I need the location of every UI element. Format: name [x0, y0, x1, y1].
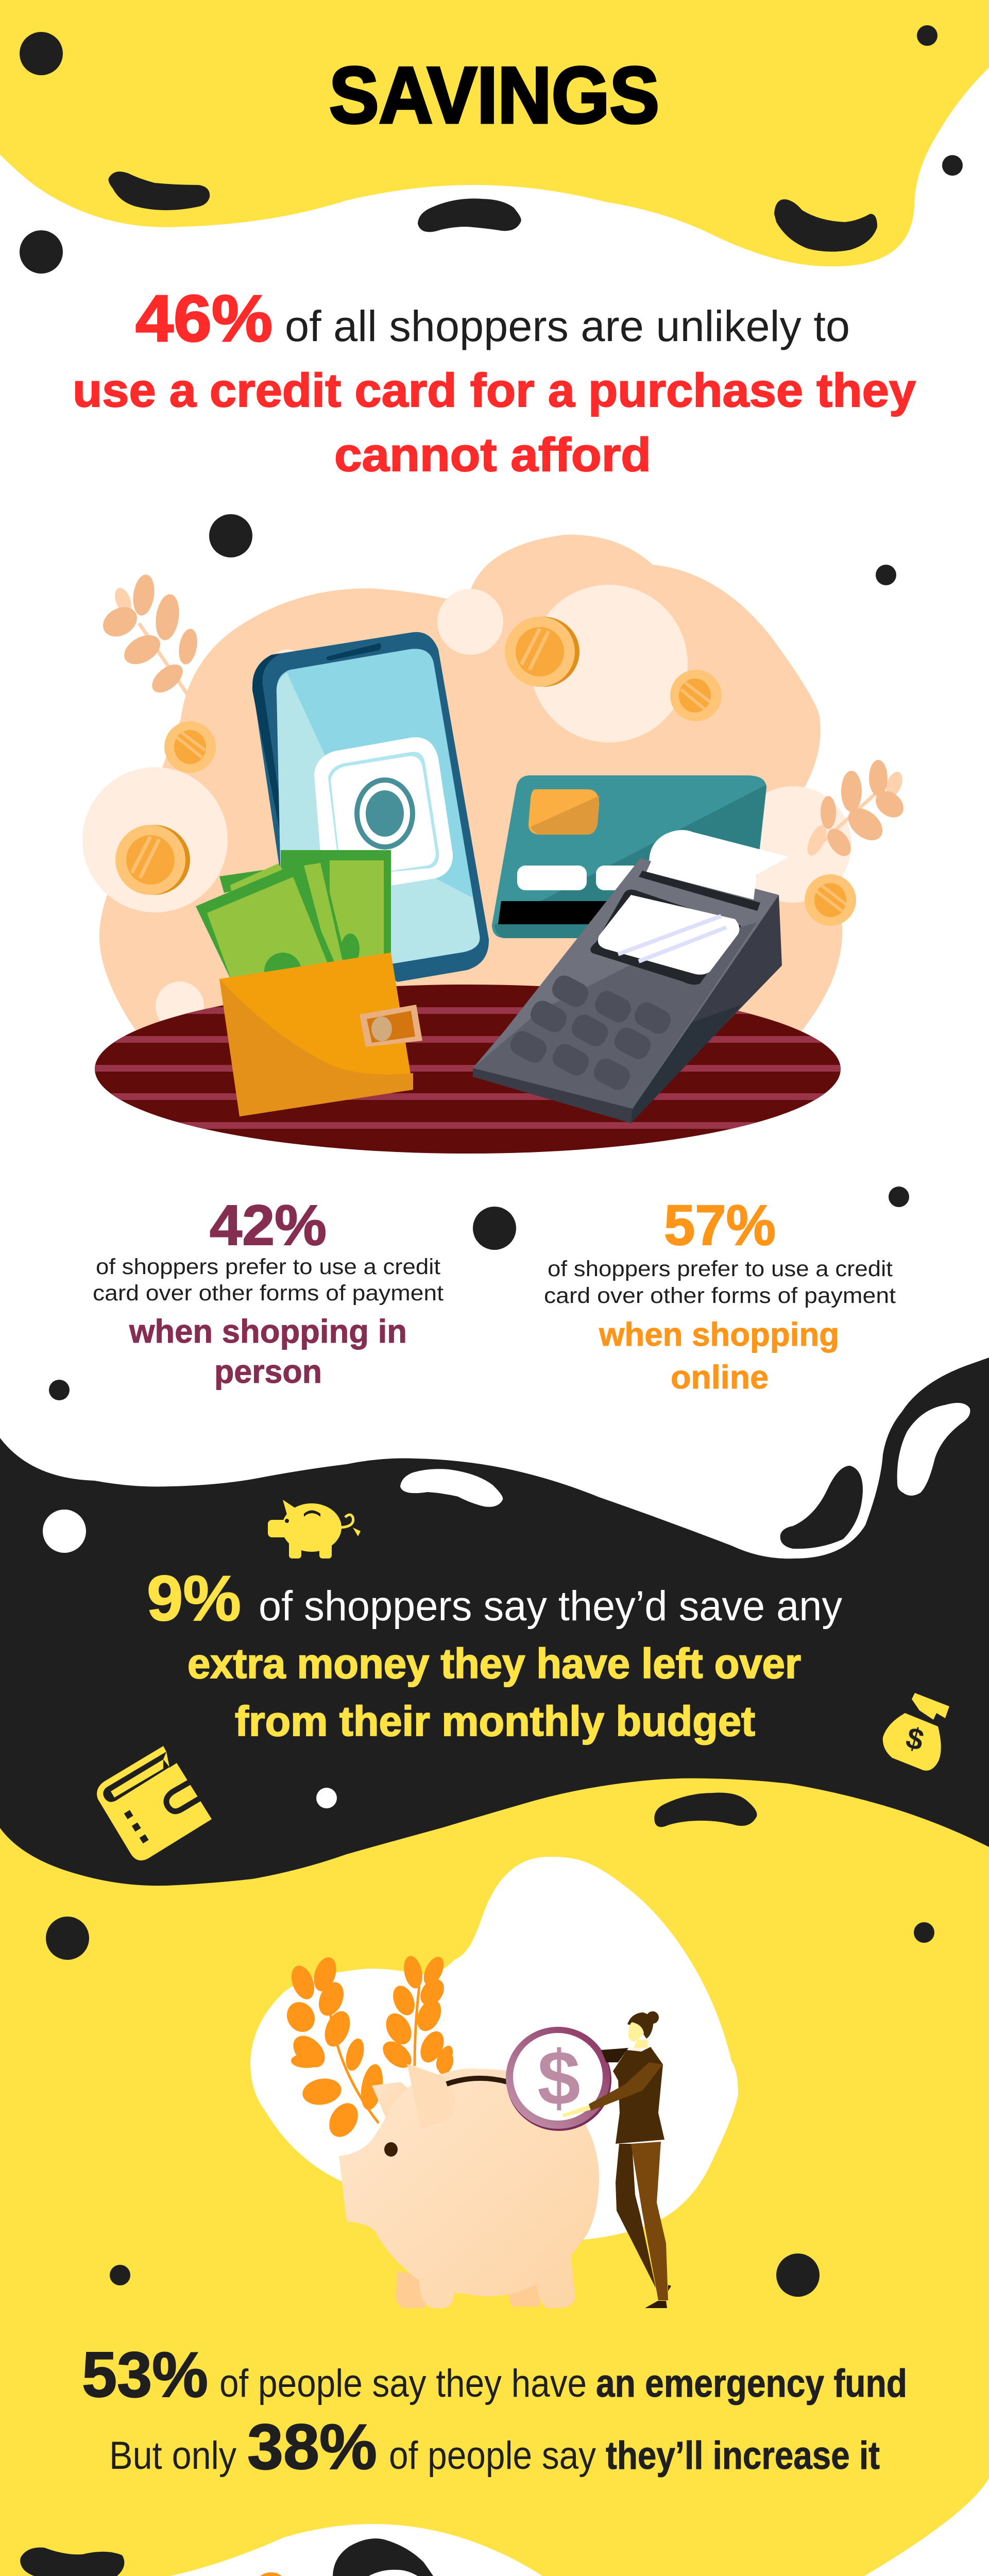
- stat: 42 percent in person: person: [214, 1353, 322, 1390]
- stat: 57 percent online: online: [671, 1359, 769, 1396]
- peach cloud background: [99, 535, 842, 1036]
- stat: 42 percent in person: card over other forms of payment: [93, 1281, 444, 1306]
- title: SAVINGS: [329, 50, 659, 140]
- stat: 9 percent text: extra money they have left over: [187, 1640, 801, 1687]
- stat: 57 percent online: when shopping: [599, 1316, 839, 1353]
- decorative dot: [917, 25, 937, 46]
- stat: 53 percent emergency fund: [82, 2340, 907, 2411]
- coins: [115, 617, 856, 926]
- stat: 57 percent online: 57%: [664, 1194, 776, 1257]
- stat: 42 percent in person: [93, 1194, 444, 1390]
- decorative dot: [914, 1922, 934, 1943]
- white blob: [402, 1470, 501, 1505]
- white streak: [899, 1404, 968, 1494]
- stat: 57 percent online: of shoppers prefer to use a credit: [548, 1257, 893, 1281]
- yellow panel: emergency fund: [0, 1778, 989, 2576]
- payment illustration: [82, 514, 909, 1154]
- stat: 38 percent will increase it: of people say: [389, 2434, 596, 2478]
- decorative dot: [776, 2253, 820, 2297]
- decorative dot: [473, 1207, 516, 1250]
- credit card: [492, 775, 766, 938]
- stat: 9 percent text: [147, 1563, 842, 1745]
- coin with dollar sign: $: [537, 2035, 581, 2121]
- decorative dot: [110, 2265, 130, 2285]
- icon: money bag: $: [902, 1721, 927, 1757]
- stat: 42 percent in person: when shopping in: [129, 1313, 407, 1350]
- stat: 9 percent text: from their monthly budget: [235, 1698, 755, 1745]
- decorative dot: [46, 1917, 89, 1960]
- decorative dot: [209, 514, 252, 557]
- smartphone: [252, 632, 489, 982]
- stat: 38 percent will increase it: But only: [109, 2434, 236, 2478]
- stat: 46 percent credit card: use a credit card for a purchase they: [73, 364, 916, 417]
- coin with dollar sign: [506, 2027, 611, 2131]
- stat: 53 percent emergency fund: 53%: [82, 2340, 208, 2411]
- wallet: [219, 953, 422, 1116]
- decorative dot: [889, 1187, 909, 1207]
- businesswoman: [562, 2011, 671, 2308]
- blob left: [110, 173, 208, 209]
- piggy bank: [339, 2064, 599, 2308]
- decorative dot: [20, 230, 63, 274]
- stat: 53 percent emergency fund: an emergency fund: [596, 2362, 907, 2405]
- white dot: [43, 1510, 86, 1553]
- orange leaf sprigs: [281, 1954, 456, 2142]
- crescent blob on white: [334, 2540, 434, 2576]
- stat: 46 percent credit card: of all shoppers are unlikely to: [285, 302, 850, 350]
- stat: 42 percent in person: of shoppers prefer to use a credit: [96, 1255, 440, 1279]
- white blob behind piggy: [250, 1857, 738, 2240]
- icon: piggy bank: [268, 1500, 361, 1558]
- stat: 57 percent online: card over other forms of payment: [544, 1283, 896, 1308]
- icon: sale bag: [228, 2574, 304, 2576]
- left wheat sprig: [98, 573, 200, 698]
- icon: money bag: [883, 1693, 949, 1771]
- cream circles: [82, 585, 851, 1031]
- card terminal: [473, 830, 789, 1123]
- blob middle: [419, 200, 520, 230]
- cash notes: [196, 850, 391, 990]
- patterned mat: [93, 985, 845, 1154]
- blob on yellow edge left: [22, 2549, 123, 2576]
- stat: 38 percent will increase it: they’ll increase it: [606, 2434, 880, 2478]
- decorative dot: [876, 565, 896, 585]
- dark panel: extra money: [0, 1358, 989, 1958]
- arch blob: [656, 1794, 756, 1825]
- decorative dot: [49, 1380, 70, 1400]
- stat: 38 percent will increase it: [109, 2412, 880, 2483]
- right wheat sprig: [804, 760, 909, 860]
- stat: 57 percent online: [544, 1194, 896, 1396]
- blob right: [776, 201, 876, 250]
- header banner: yellow blob: [0, 0, 989, 274]
- stat: 9 percent text: of shoppers say they’d save any: [259, 1583, 842, 1630]
- decorative dot: [20, 32, 63, 75]
- stat: 53 percent emergency fund: of people say they have: [219, 2362, 587, 2405]
- white dot: [316, 1788, 337, 1808]
- stat: 46 percent credit card: 46%: [135, 282, 272, 355]
- dark drip: [782, 1467, 861, 1547]
- decorative dot: [942, 155, 963, 176]
- stat: 46 percent credit card: [73, 282, 916, 481]
- stat: 46 percent credit card: cannot afford: [334, 429, 651, 481]
- stat: 42 percent in person: 42%: [210, 1194, 327, 1257]
- stat: 38 percent will increase it: 38%: [247, 2412, 377, 2483]
- stat: 9 percent text: 9%: [147, 1563, 241, 1634]
- icon: wallet: [97, 1746, 212, 1860]
